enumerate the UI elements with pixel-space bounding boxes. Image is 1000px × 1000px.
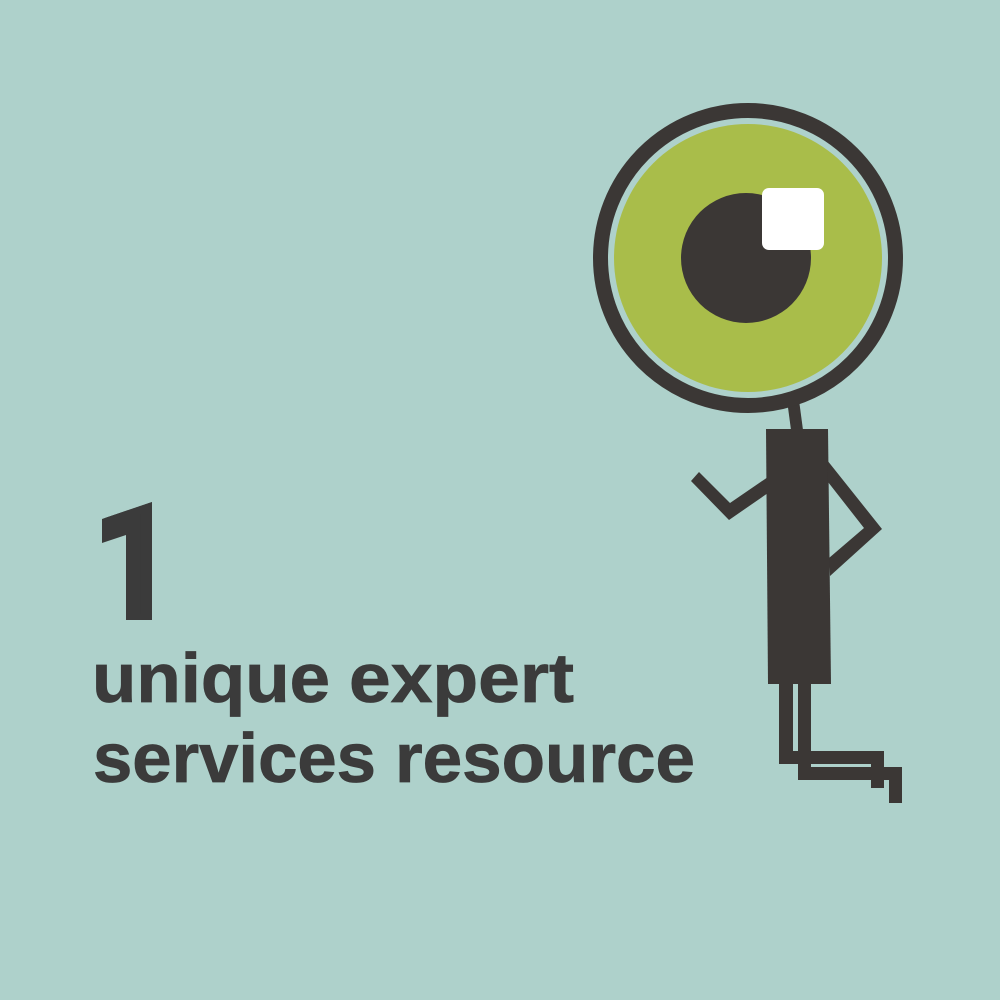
right arm on hip — [827, 460, 882, 576]
character: magnifying-glass expert — [600, 110, 902, 803]
infographic canvas — [95, 103, 903, 803]
caption line: unique expert: unique — [92, 639, 330, 717]
big number 1: 1 — [86, 464, 186, 665]
magnifier handle / neck — [787, 400, 803, 430]
legs and feet — [779, 684, 902, 803]
eye iris — [614, 124, 882, 392]
magnifier ring — [600, 110, 896, 406]
caption line: unique expert: expert — [349, 639, 574, 717]
eye highlight — [762, 188, 824, 250]
eye pupil — [681, 193, 811, 323]
caption line: unique expert — [92, 639, 574, 717]
caption line: services resource: resource — [395, 719, 695, 797]
body — [766, 429, 831, 684]
caption line: services resource: services — [93, 719, 376, 797]
left arm — [691, 472, 768, 520]
caption line: services resource — [93, 719, 695, 797]
